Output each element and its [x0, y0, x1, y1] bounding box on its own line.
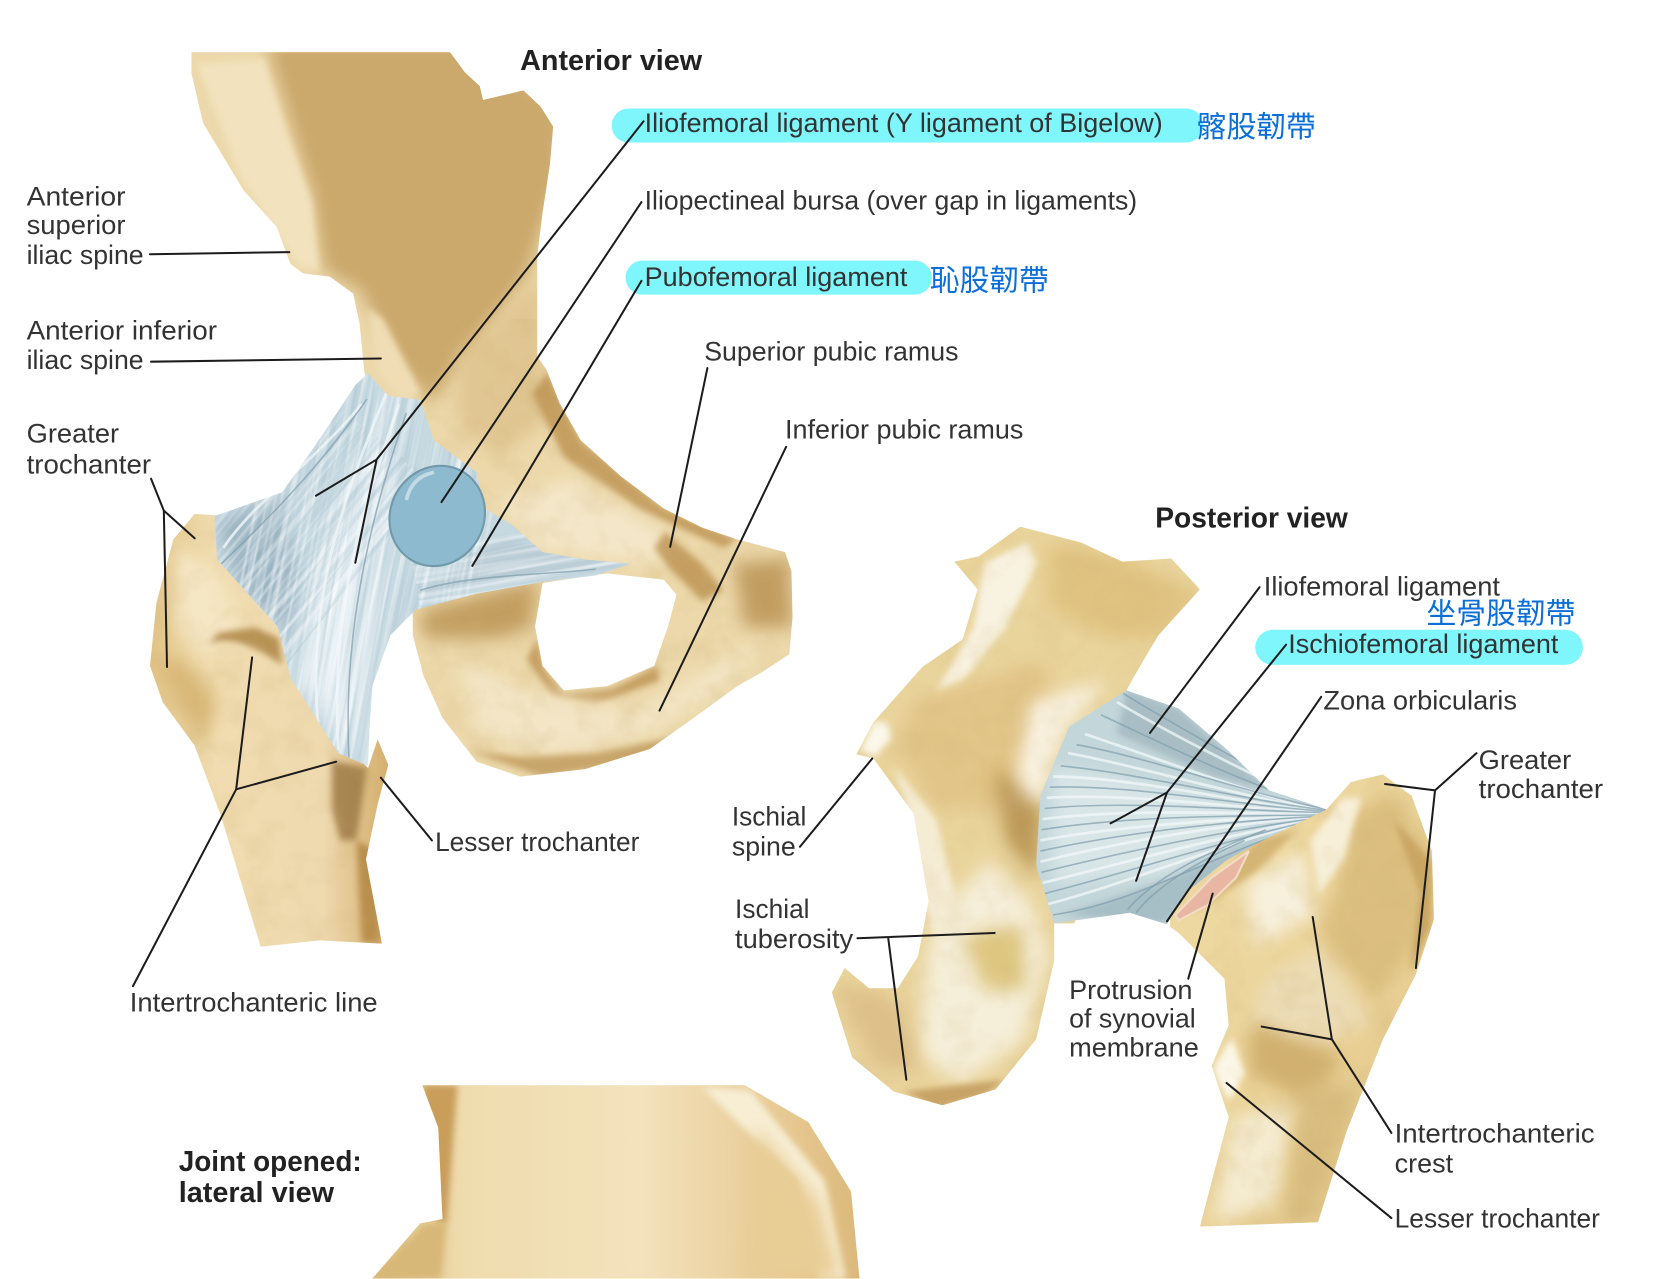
heading: posterior view: Posterior view [1155, 503, 1348, 535]
labels: posterior view: crest [1395, 1148, 1454, 1178]
labels: posterior view: Iliofemoral ligament [1264, 572, 1501, 602]
labels: posterior view: of synovial [1069, 1004, 1196, 1034]
labels: anterior left side: Anterior inferior [27, 315, 217, 345]
labels: anterior left side: Anterior [27, 181, 126, 211]
labels: anterior left side: iliac spine [27, 240, 144, 270]
ligaments: posterior capsule [1036, 690, 1326, 924]
annotations: chinese ligament names: 恥股韌帶 [930, 264, 1049, 297]
labels: posterior view: Ischial [732, 802, 806, 832]
labels: posterior view: tuberosity [735, 924, 854, 954]
labels: anterior left side: superior [27, 210, 126, 240]
annotations: chinese ligament names: 髂股韌帶 [1197, 111, 1316, 144]
illustration: joint opened lateral view [362, 1080, 872, 1279]
highlight: ischiofemoral ligament [1255, 630, 1583, 665]
labels: posterior view: membrane [1069, 1032, 1199, 1062]
labels: posterior view: Protrusion [1069, 975, 1192, 1005]
labels: anterior left side: trochanter [27, 449, 151, 479]
labels: posterior view: Ischial [735, 894, 810, 924]
labels: anterior right side: Iliopectineal bursa (over gap in ligaments) [645, 186, 1137, 216]
annotations: chinese ligament names [930, 111, 1575, 630]
synovial membrane protrusion [1175, 851, 1249, 920]
labels: anterior left side: Greater [27, 419, 119, 449]
labels: posterior view: Ischiofemoral ligament [1288, 629, 1559, 659]
obturator foramen opening [535, 573, 677, 690]
labels: anterior right side: Lesser trochanter [435, 827, 639, 857]
labels: anterior right side: Iliofemoral ligament (Y ligament of Bigelow) [645, 108, 1163, 138]
bone: posterior femur [1170, 766, 1447, 1245]
heading: joint opened lateral view: lateral view [179, 1177, 335, 1209]
annotations: chinese ligament names: 坐骨股韌帶 [1427, 597, 1575, 630]
labels: anterior right side: Pubofemoral ligament [645, 262, 908, 292]
illustration: posterior view of hip [819, 521, 1447, 1245]
bone: anterior pelvis [181, 43, 808, 787]
highlight: pubofemoral ligament [626, 261, 932, 295]
labels: posterior view: spine [732, 831, 796, 861]
leader lines [133, 121, 1477, 1218]
labels: posterior view [732, 572, 1603, 1234]
bone: anterior femur [150, 514, 388, 947]
labels: anterior right side [130, 108, 1163, 1018]
heading: joint opened lateral view [179, 1146, 362, 1209]
labels: posterior view: Intertrochanteric [1395, 1119, 1595, 1149]
ligaments: anterior capsule [215, 374, 630, 766]
bone: posterior pelvis [832, 526, 1200, 1106]
labels: posterior view: Lesser trochanter [1395, 1204, 1600, 1234]
heading: joint opened lateral view: Joint opened: [179, 1146, 362, 1178]
labels: anterior right side: Intertrochanteric line [130, 988, 378, 1018]
labels: posterior view: Greater [1479, 745, 1571, 775]
labels: anterior left side [27, 181, 217, 479]
illustration: anterior view of hip [150, 52, 792, 947]
labels: posterior view: trochanter [1479, 774, 1603, 804]
heading: anterior view: Anterior view [520, 45, 703, 77]
highlight: iliofemoral ligament [612, 109, 1203, 143]
labels: anterior right side: Superior pubic ramus [704, 337, 958, 367]
labels: anterior left side: iliac spine [27, 345, 144, 375]
bursa [372, 449, 503, 583]
labels: posterior view: Zona orbicularis [1323, 686, 1517, 716]
labels: anterior right side: Inferior pubic ramus [785, 414, 1023, 444]
